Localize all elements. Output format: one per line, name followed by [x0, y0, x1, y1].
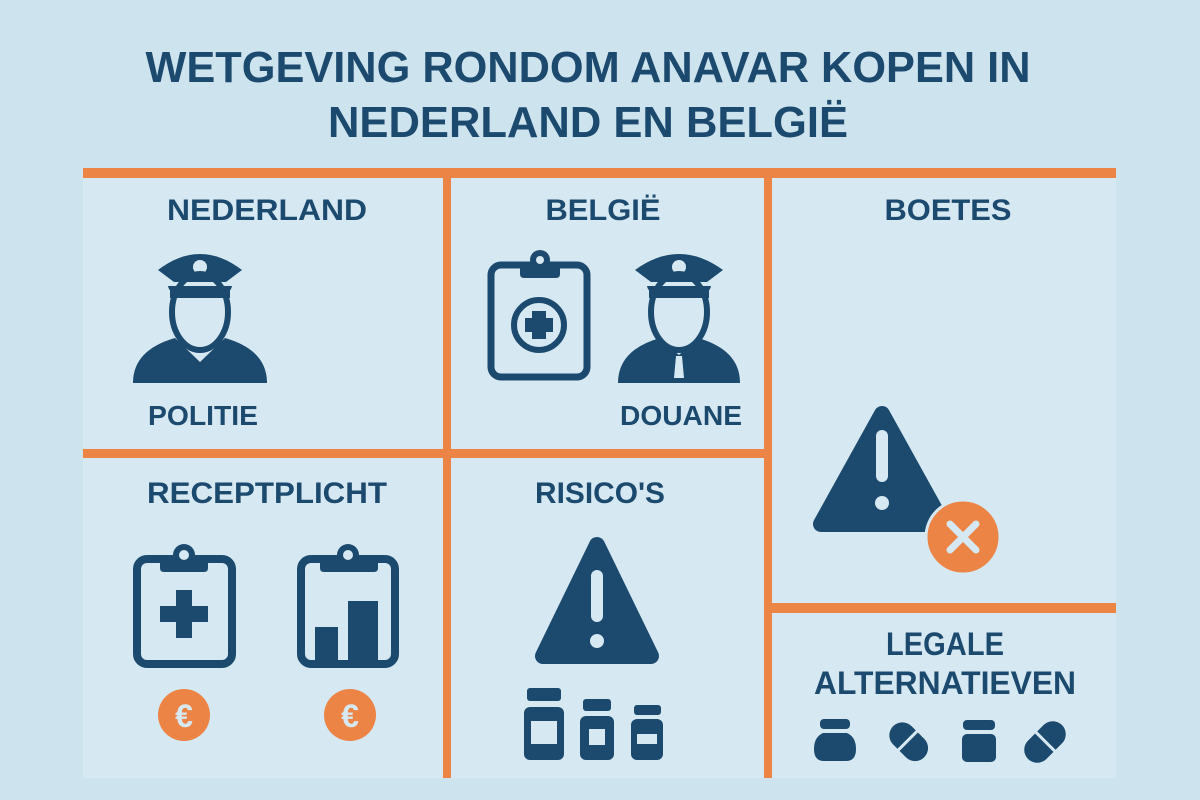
heading: receptplicht: RECEPTPLICHT	[147, 477, 387, 510]
icons: supplements	[814, 714, 1073, 770]
icon: euro coins: €	[175, 698, 193, 734]
icon: warning with cross	[821, 414, 1000, 574]
title	[146, 43, 1030, 147]
icon: clipboard with cross	[137, 544, 232, 664]
icon: warning triangle	[543, 545, 651, 656]
panel grid background	[83, 170, 1116, 778]
icon: euro coins: €	[341, 698, 359, 734]
panel: legale alternatieven: ALTERNATIEVEN	[814, 665, 1076, 701]
icon: customs officer	[618, 254, 740, 383]
heading: belgie: BELGIË	[546, 194, 660, 227]
panel: receptplicht	[137, 477, 395, 741]
label: politie: POLITIE	[148, 400, 258, 431]
icon: clipboard with chart	[301, 544, 395, 664]
panel: belgie	[491, 194, 742, 431]
panel: nederland	[133, 194, 367, 431]
icon: medicine bottles	[524, 688, 663, 760]
title: WETGEVING RONDOM ANAVAR KOPEN IN	[146, 43, 1030, 92]
panel: risicos	[524, 477, 665, 760]
panel: boetes	[821, 194, 1012, 574]
heading: risicos: RISICO'S	[535, 477, 665, 510]
icon: euro coins	[158, 689, 376, 741]
heading: boetes: BOETES	[884, 194, 1012, 227]
label: douane: DOUANE	[620, 400, 742, 431]
heading: legale alternatieven: LEGALE	[886, 626, 1004, 662]
title: NEDERLAND EN BELGIË	[328, 98, 848, 147]
panel: legale alternatieven	[814, 626, 1076, 770]
icon: medical clipboard	[491, 250, 587, 377]
icon: police officer	[133, 254, 267, 383]
heading: nederland: NEDERLAND	[167, 194, 367, 227]
